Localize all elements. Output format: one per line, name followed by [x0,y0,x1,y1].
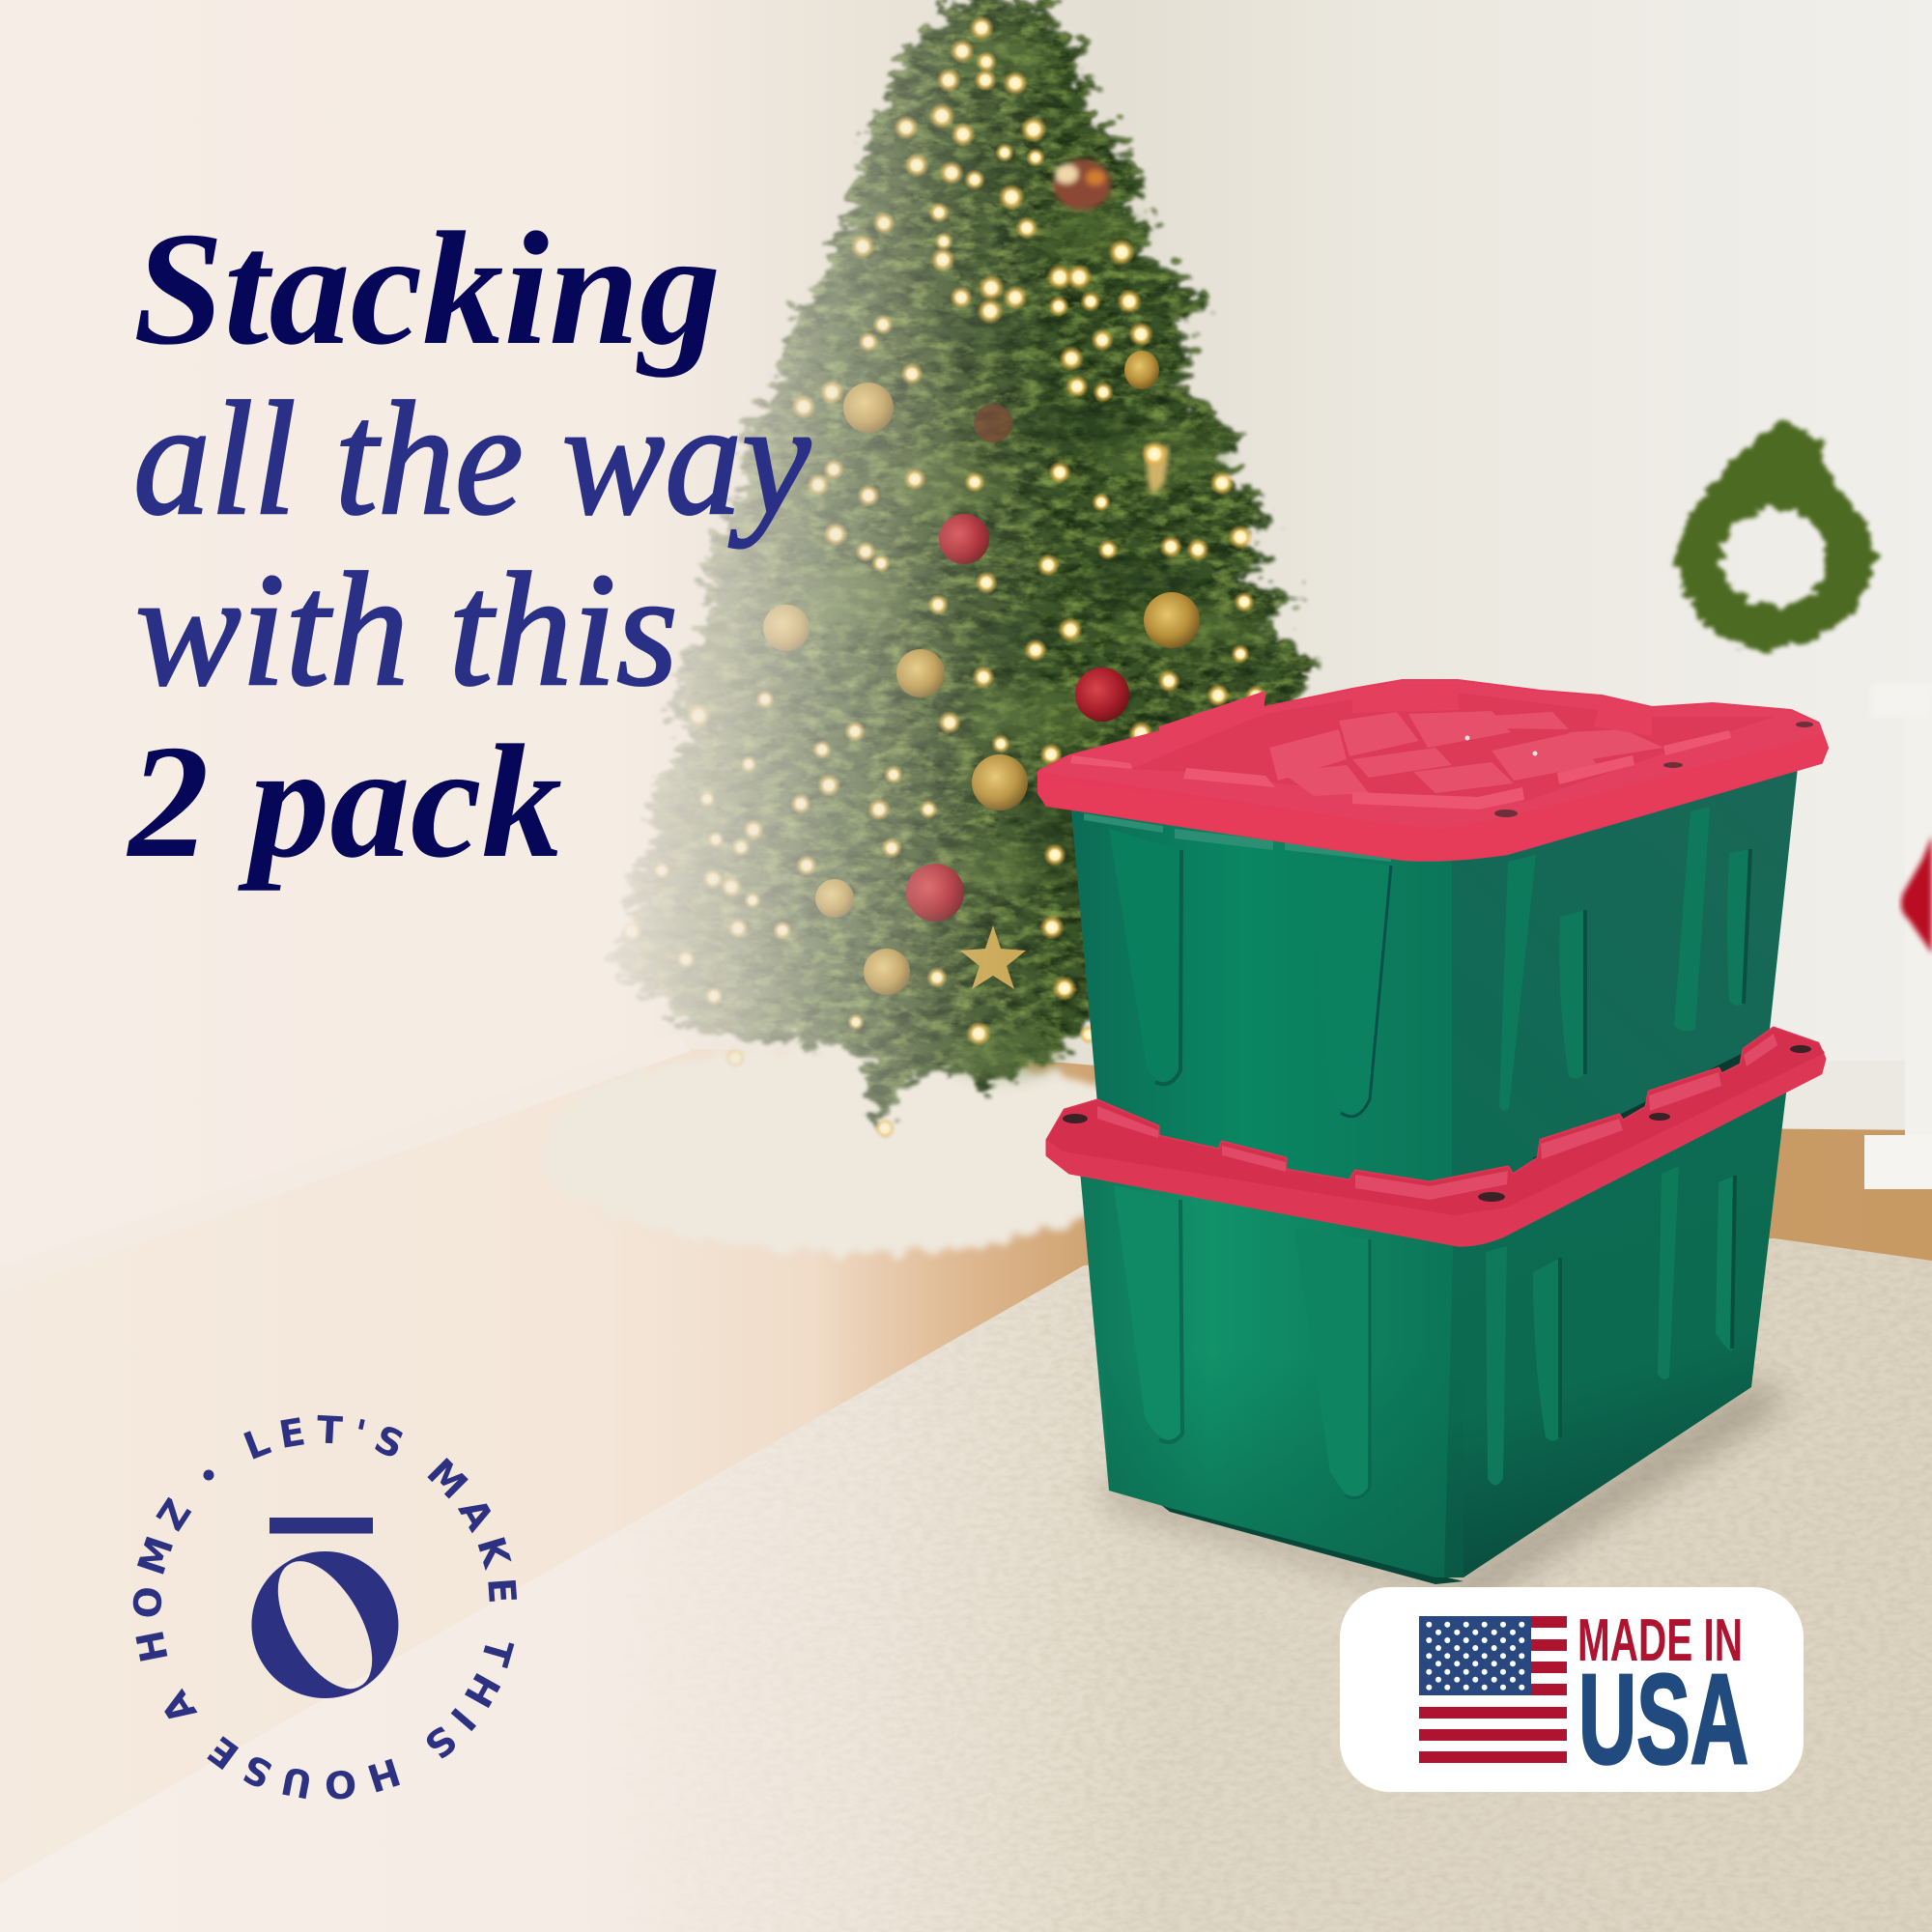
lower tote left face [1078,1150,1463,1577]
box shadow [1101,1381,1787,1604]
string lights [621,15,1266,1139]
lower tote lid rim [1047,1028,1825,1245]
fireplace and stocking at right edge [1864,684,1932,1189]
heading line 1: Stacking [133,199,721,379]
left baseboard [0,1034,691,1292]
rug texture [821,1240,1932,1932]
lid tabs [1070,730,1731,810]
lid outline [1039,681,1827,860]
lower tote shading [1103,1352,1463,1577]
lower tote bottom pad [1145,1492,1463,1584]
lid front band highlight [1039,734,1827,860]
stacked storage totes [1039,681,1827,1584]
baseboard [1719,1061,1932,1130]
rug [0,1238,1932,1932]
lid screws [1464,736,1470,740]
separator dot [203,1470,214,1480]
gap shadow above lower rim [1536,1048,1768,1164]
lower rim holes [1063,1045,1811,1202]
heading [126,199,810,892]
heading line 4: 2 pack [126,712,562,892]
tree foliage [611,0,1321,1136]
lid recessed tray [1131,693,1774,802]
lower rim tabs highlight [1097,1034,1777,1200]
logo badge [133,1414,518,1799]
lid corner walls [1159,681,1652,753]
flag stripes [1419,1616,1567,1763]
upper tote lid [1039,681,1827,860]
american flag [1419,1616,1567,1763]
upper tote body [1071,758,1799,1208]
background: wall [0,0,1932,1352]
heading line 2: all the way [133,369,810,549]
lower tote right face [1444,1077,1788,1577]
ornaments [763,159,1200,995]
heading line 3: with this [135,540,678,720]
made in text: MADE IN [1577,1607,1743,1674]
ring path [161,1443,490,1772]
tree highlights [792,39,1265,1078]
flag stars [1426,1622,1524,1690]
made in usa badge [1340,1587,1804,1792]
lower rim top surface [1047,1028,1825,1215]
lid holes [1494,722,1813,817]
floor: wood [0,1048,1932,1932]
upper tote ribs [1109,807,1750,1117]
circular tagline: LET'S MAKE THIS HOUSE A HOMZ [133,1414,518,1799]
logo macron bar [270,1518,373,1534]
lower tote ribs [1114,1166,1735,1498]
badge background [1340,1587,1804,1792]
christmas tree [611,0,1321,1139]
wreath on wall [1673,417,1877,654]
usa text: USA [1578,1648,1748,1790]
lid top rim surface [1039,681,1824,829]
upper tote left face [1071,810,1452,1208]
upper tote latches [1084,813,1391,862]
lower tote [1078,1077,1788,1584]
upper tote right face [1452,758,1799,1208]
tree skirt [541,1045,1159,1254]
logo o mark [251,1551,398,1698]
flag canton [1419,1616,1531,1695]
lid raised tiles [1269,711,1663,796]
tree shadows [937,158,1198,879]
